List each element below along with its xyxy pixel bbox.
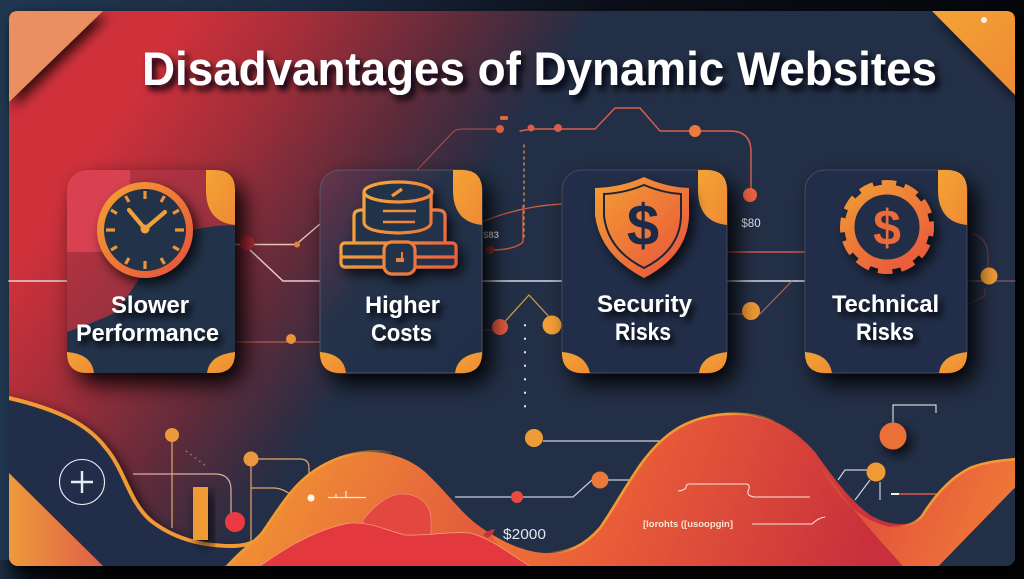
leaf accents — [562, 170, 727, 373]
triangle bottom left — [9, 473, 103, 566]
card: Slower Performance — [67, 170, 235, 373]
bottom wave area — [0, 395, 1024, 579]
right nodes — [838, 405, 940, 500]
card label: Security — [597, 291, 693, 318]
card label: Technical — [832, 291, 939, 318]
card: Higher Costs — [320, 170, 482, 373]
plus button icon — [60, 460, 104, 504]
leaf accents — [320, 170, 482, 373]
icon: gear with dollar: $ — [873, 200, 901, 256]
mini chart — [133, 428, 309, 545]
right ridge shade — [782, 426, 1015, 566]
card label: Performance — [76, 320, 219, 347]
title: Disadvantages of Dynamic Websites — [142, 42, 937, 95]
small leaf mark — [483, 529, 495, 538]
small label $83: $83 — [483, 230, 499, 241]
card label: Higher — [365, 292, 440, 319]
card label: Risks — [856, 319, 914, 346]
icon: server stack with lock — [341, 182, 456, 274]
left wave — [9, 392, 254, 566]
red foreground hill — [260, 522, 530, 566]
price label $2,000: $2000 — [503, 527, 546, 543]
left orange hill and valley — [215, 414, 1024, 579]
corner triangle top right — [932, 11, 1015, 95]
card: Technical Risks — [805, 170, 967, 373]
card label: Slower — [111, 292, 189, 319]
connector lines network — [9, 108, 1015, 418]
leaf accents — [67, 170, 235, 373]
small label $80: $80 — [741, 218, 761, 230]
card label: Risks — [615, 319, 671, 346]
card: Security Risks — [562, 170, 727, 373]
inner small hill — [363, 494, 431, 536]
connector lines at mid bottom — [455, 429, 662, 503]
icon: shield with dollar: $ — [627, 193, 659, 258]
corner triangle top left — [9, 11, 103, 102]
icon: gear with dollar — [839, 179, 935, 275]
leaf accents — [805, 170, 967, 373]
icon: clock — [100, 186, 190, 274]
hill annotation marks — [307, 484, 825, 524]
connector nodes — [240, 116, 998, 344]
hill edge highlights — [215, 414, 1024, 579]
hill caption: [lorohts ([usoopgin] — [643, 519, 733, 530]
icon: shield with dollar — [595, 177, 689, 278]
card label: Costs — [371, 320, 432, 347]
